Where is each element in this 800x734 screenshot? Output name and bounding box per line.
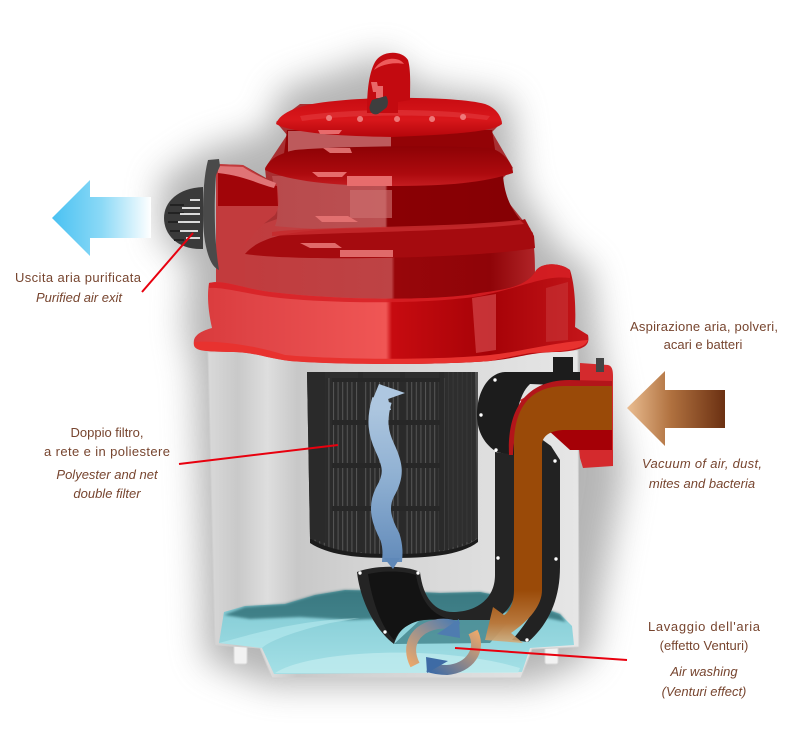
drop shadow of the appliance — [160, 55, 625, 685]
leader line: venturi — [455, 648, 627, 660]
label: air intake: mites and bacteria — [649, 476, 755, 491]
label: air washing: (effetto Venturi) — [660, 638, 748, 653]
label: purified air exit — [15, 270, 142, 305]
label: purified air exit: Purified air exit — [36, 290, 123, 305]
lower dome — [218, 195, 535, 305]
label: air intake — [630, 319, 778, 491]
leader line: filter — [179, 445, 338, 464]
top cap — [276, 98, 502, 137]
label: air washing — [648, 619, 761, 699]
middle shelf — [265, 146, 513, 186]
leader line: exit — [142, 233, 193, 292]
arrow: purified air exit — [52, 180, 151, 256]
swirl arrows: venturi effect — [411, 619, 476, 673]
handle — [367, 53, 410, 113]
lid backing silhouette — [216, 104, 536, 305]
filter cartridge — [307, 372, 478, 558]
outlet collar — [216, 164, 279, 290]
lower dome shoulder — [245, 219, 535, 258]
black duct — [357, 357, 580, 644]
orange air flow — [485, 386, 612, 643]
label: air washing: (Venturi effect) — [662, 684, 746, 699]
red band around the duct elbow — [509, 380, 612, 455]
label: air intake: Vacuum of air, dust, — [642, 456, 762, 471]
blue wavy air flow arrow — [370, 384, 405, 569]
label: double filter — [44, 425, 170, 501]
outlet black ring — [203, 159, 220, 270]
label: double filter: Doppio filtro, — [71, 425, 143, 440]
teal shadow under the duct — [394, 618, 510, 644]
top neck — [283, 130, 497, 162]
label: air washing: Air washing — [669, 664, 738, 679]
red air inlet — [520, 358, 613, 468]
label: air washing: Lavaggio dell'aria — [648, 619, 761, 634]
nozzle — [369, 96, 388, 114]
label: double filter: Polyester and net — [56, 467, 159, 482]
appliance illustration — [164, 53, 613, 678]
outlet grill — [164, 187, 203, 249]
label: double filter: double filter — [73, 486, 141, 501]
upper neck — [272, 176, 522, 230]
label: air intake: Aspirazione aria, polveri, — [630, 319, 778, 334]
water — [219, 590, 574, 674]
arrow: air intake — [627, 371, 725, 446]
transparent tank — [208, 350, 579, 678]
main rim — [194, 264, 588, 364]
feet — [234, 640, 558, 664]
label: air intake: acari e batteri — [664, 337, 742, 352]
red lid — [194, 53, 588, 364]
label: double filter: a rete e in poliestere — [44, 444, 170, 459]
label: purified air exit: Uscita aria purificata — [15, 270, 142, 285]
